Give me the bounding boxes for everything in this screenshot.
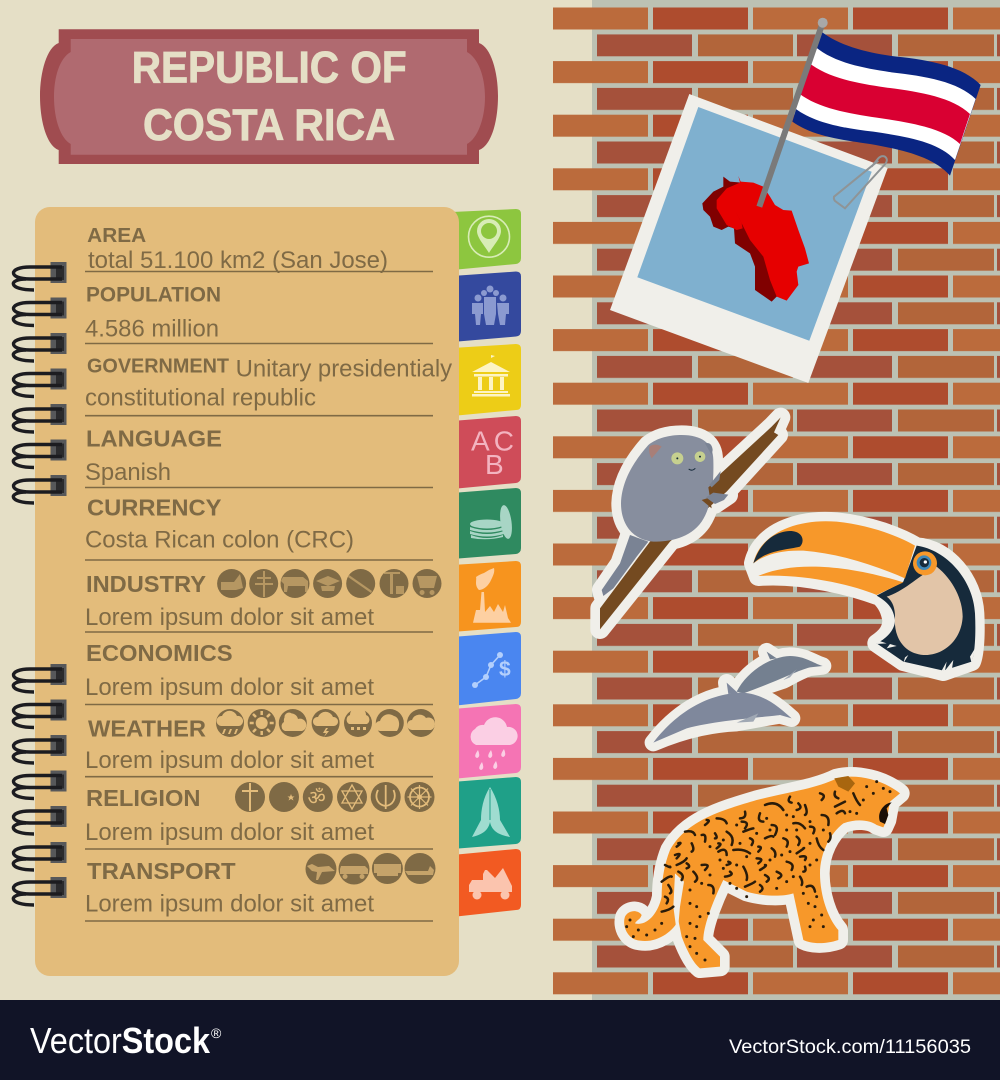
paper clip [834,156,887,208]
lower paw [706,493,728,504]
tab: language: B [485,449,504,480]
footer bar [0,1000,1000,1080]
title plaque [40,29,498,164]
body [621,435,713,542]
icons: religion: ॐ [308,788,326,810]
spiral binding: lower [13,664,66,905]
beak patch [753,531,803,563]
title text: REPUBLIC OF [132,44,407,93]
tab: economics: $ [499,658,511,681]
sticker: jaguar [624,776,900,968]
tab: area [452,209,521,270]
head black [877,546,975,671]
cheek [887,567,963,655]
section: transport [85,853,436,918]
ear [834,776,855,792]
section: weather: WEATHER [88,716,206,742]
tab: industry [452,561,521,632]
section: government [85,356,452,412]
tab: weather [452,704,521,779]
section: religion: RELIGION [86,785,200,811]
section: economics [85,640,374,701]
section: government: Unitary presidentialy [236,356,452,383]
icons: transport [306,853,436,884]
leg and tail gap [673,873,684,937]
section: industry: Lorem ipsum dolor sit amet [85,604,374,631]
section: language: Spanish [85,459,171,486]
sticker: dolphins [653,652,823,743]
icons: religion [235,782,434,812]
tab: government [452,344,521,416]
section: transport: TRANSPORT [87,858,236,884]
section: area [87,225,388,274]
sticker: toucan [753,521,975,672]
icons: industry [217,569,442,598]
notebook page [35,207,459,976]
tab: language [452,416,521,489]
mouth [879,802,892,824]
upper dolphin [737,652,823,693]
spots [627,782,890,960]
watermark id: VectorStock.com/11156035 [729,1036,971,1058]
section: economics: Lorem ipsum dolor sit amet [85,674,374,701]
registered mark: ® [211,1025,222,1041]
section: area: AREA [87,225,146,247]
flagpole [759,18,828,207]
tab: language: AC [471,426,514,457]
map of Costa Rica [702,176,809,302]
section: weather: Lorem ipsum dolor sit amet [85,747,374,774]
section: government: constitutional republic [85,384,316,412]
rosettes [662,792,860,912]
tail [602,535,648,596]
section: religion [85,782,434,846]
sticker outline [624,777,900,968]
sticker outline [653,652,823,743]
section: currency: Costa Rican colon (CRC) [85,526,354,553]
flag of Costa Rica [792,31,981,176]
spiral binding: upper [13,262,66,503]
sticker outline [600,417,781,629]
section: industry: INDUSTRY [86,571,206,597]
polaroid photo with map [610,94,888,383]
photo sky [637,107,872,341]
section: government: GOVERNMENT [87,356,229,378]
sticker: tarsier on branch [600,417,781,629]
section: transport: Lorem ipsum dolor sit amet [85,891,374,918]
watermark logo: VectorStock [30,1020,211,1061]
lower dolphin [653,683,792,743]
upper paw [709,471,721,487]
section: currency [85,495,354,553]
section: population: 4.586 million [85,316,219,343]
eyes [671,451,705,470]
section: weather [85,707,435,774]
tab: transport [452,849,521,917]
tab: religion [452,777,521,849]
brick wall [553,0,1000,1000]
title text: COSTA RICA [143,101,395,150]
ear left [649,445,662,458]
tab: currency [452,488,521,559]
section: currency: CURRENCY [87,495,222,521]
tab: population [452,272,521,342]
icons: weather [216,707,435,737]
category tabs [452,209,521,917]
section: language [85,426,222,486]
lower beak [758,567,903,595]
branch [600,417,781,629]
ear right [705,443,713,455]
section: population [85,284,221,343]
section: industry [85,569,442,631]
divider lines [85,272,433,921]
sticker outline [753,521,975,672]
section: economics: ECONOMICS [86,640,233,666]
section: area: total 51.100 km2 (San Jose) [88,247,388,274]
branch section over body [702,468,735,508]
body [624,777,900,968]
fur fringe [877,641,975,671]
section: language: LANGUAGE [86,426,222,452]
tab: economics [452,632,521,706]
section: religion: Lorem ipsum dolor sit amet [85,819,374,846]
title text [132,44,407,150]
section: population: POPULATION [86,284,221,307]
eye [913,551,937,575]
upper beak [753,521,915,578]
photo frame [610,94,888,383]
